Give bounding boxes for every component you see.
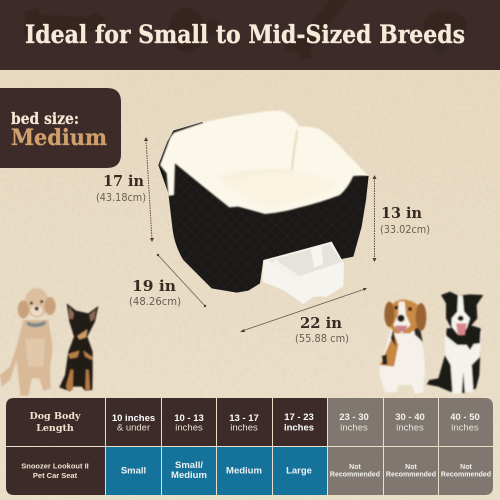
header banner (0, 0, 500, 70)
bed size label: bed size: (11, 109, 79, 128)
table header cell: dog body length (6, 398, 105, 446)
label: 13 in: (33.02cm) (380, 224, 430, 236)
column: 23 to 30 inches: Recommended (330, 472, 380, 478)
product: car seat bed (158, 111, 369, 304)
tray (263, 242, 344, 304)
arrow: 13 in height (372, 175, 376, 262)
column: 17 to 23 inches: inches (284, 422, 314, 434)
column: 10 to 13 inches: inches (175, 422, 203, 434)
arrow: 19 in depth (157, 254, 206, 307)
table header cell: dog body length: Dog Body (29, 411, 81, 422)
column: 13 to 17 inches (217, 398, 272, 495)
column: 10 inches and under: & under (117, 422, 150, 434)
label: 17 in (96, 172, 146, 204)
column: 10 inches and under: Small (121, 466, 146, 476)
table header cell: dog body length: Length (36, 423, 74, 434)
column: 13 to 17 inches: Medium (226, 466, 262, 476)
table row label: product (6, 447, 105, 495)
column: 40 to 50 inches: inches (451, 422, 479, 434)
arrow: 22 in width (240, 288, 367, 332)
icon: border collie (427, 292, 483, 393)
fleece lining (160, 111, 367, 214)
label: 19 in: 19 in (132, 277, 176, 295)
table row label: product: Pet Car Seat (33, 471, 78, 480)
column: 10 to 13 inches (162, 398, 216, 495)
bone and paw pattern (24, 0, 467, 60)
black quilted body (158, 122, 369, 293)
column: 17 to 23 inches (273, 398, 327, 495)
column: 40 to 50 inches (439, 398, 493, 495)
label: 17 in: (43.18cm) (96, 192, 146, 204)
column: 10 to 13 inches: 10 - 13 (174, 413, 204, 424)
column: 30 to 40 inches: 30 - 40 (395, 412, 425, 423)
label: 13 in: 13 in (381, 204, 422, 222)
column: 13 to 17 inches: 13 - 17 (229, 413, 259, 424)
column: 30 to 40 inches: Not (405, 464, 417, 471)
column: 17 to 23 inches: Large (286, 466, 312, 476)
fleece crease (292, 130, 297, 171)
label: 22 in: 22 in (300, 314, 342, 332)
panel: bed size (0, 88, 121, 168)
icon: beagle (379, 300, 426, 393)
fleece seat interior (220, 171, 337, 207)
label: 13 in (380, 204, 430, 236)
column: 23 to 30 inches: 23 - 30 (339, 412, 369, 423)
column: 23 to 30 inches: Not (349, 464, 361, 471)
column: 10 to 13 inches: Medium (171, 470, 207, 481)
label: 17 in: 17 in (103, 172, 144, 190)
column: 30 to 40 inches (384, 398, 438, 495)
arrow: 17 in height (144, 137, 154, 242)
label: 19 in (129, 277, 181, 308)
icon: poodle (0, 288, 56, 396)
icon: miniature pinscher (59, 303, 98, 391)
table row label: product: Snoozer Lookout II (21, 462, 89, 470)
label: 19 in: (48.26cm) (129, 296, 181, 308)
column: 10 to 13 inches: Small/ (175, 460, 203, 471)
label: 22 in: (55.88 cm) (295, 333, 349, 345)
column: 40 to 50 inches: Recommended (441, 472, 491, 478)
column: 23 to 30 inches (328, 398, 383, 495)
label: 22 in (295, 314, 349, 345)
bed size value: Medium (11, 125, 107, 151)
table: size chart (6, 398, 493, 495)
column: 10 inches and under (106, 398, 161, 495)
column: 30 to 40 inches: Recommended (386, 472, 436, 478)
column: 17 to 23 inches: 17 - 23 (284, 412, 314, 423)
column: 40 to 50 inches: Not (460, 464, 472, 471)
column: 30 to 40 inches: inches (396, 422, 424, 434)
column: 13 to 17 inches: inches (230, 422, 258, 434)
column: 40 to 50 inches: 40 - 50 (450, 412, 480, 423)
column: 10 inches and under: 10 inches (112, 413, 155, 424)
column: 23 to 30 inches: inches (340, 422, 368, 434)
